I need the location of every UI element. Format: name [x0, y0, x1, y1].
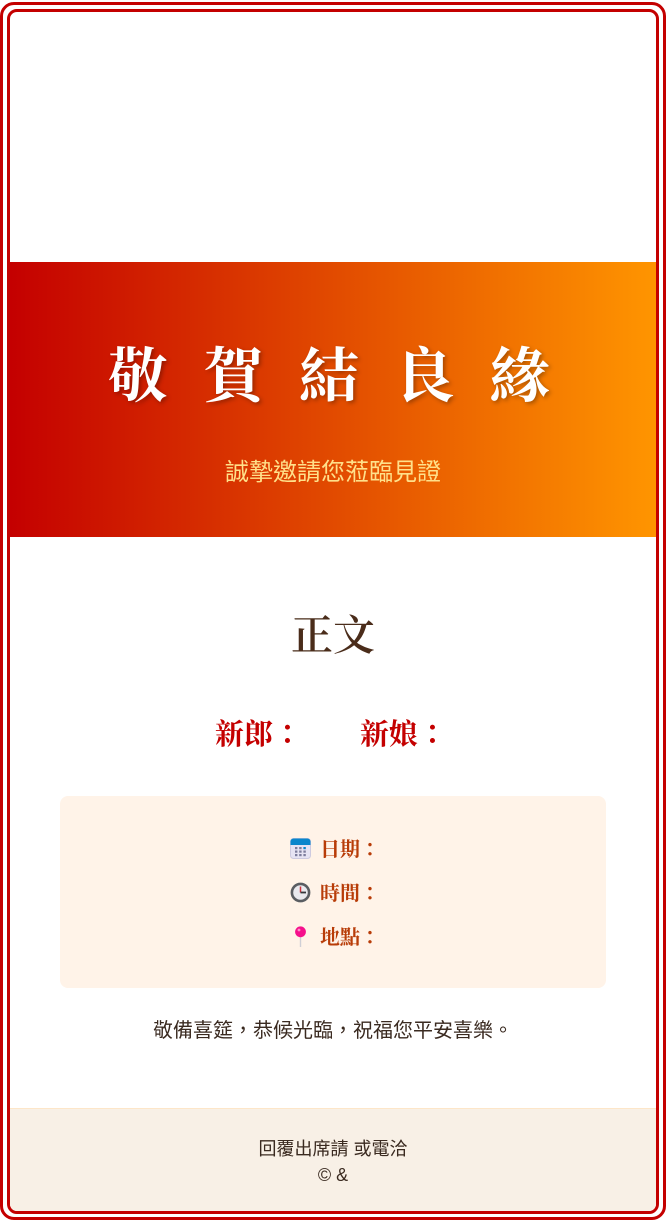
groom label: 新郎：: [215, 719, 302, 751]
copyright line: © &: [318, 1165, 348, 1185]
subtitle: 誠摯邀請您蒞臨見證: [225, 459, 441, 486]
closing message: 敬備喜筵，恭候光臨，祝福您平安喜樂。: [153, 1020, 513, 1042]
time label: 時間：: [320, 883, 380, 905]
panel: event details: [60, 796, 606, 988]
location row: [295, 926, 380, 949]
icon: clock: [290, 882, 310, 902]
heading: 正文: 正文: [291, 614, 375, 660]
date label: 日期：: [320, 839, 380, 861]
date row: [290, 838, 380, 861]
icon: calendar: [290, 838, 311, 859]
title: 敬 賀 結 良 緣: [108, 344, 558, 410]
header banner: [10, 262, 656, 537]
footer: [10, 1108, 656, 1213]
time row: [290, 882, 380, 905]
icon: pin: [295, 926, 306, 947]
couple names: [215, 719, 447, 751]
rsvp line: 回覆出席請 或電洽: [258, 1139, 408, 1159]
location label: 地點：: [320, 927, 380, 949]
bride label: 新娘：: [360, 719, 447, 751]
